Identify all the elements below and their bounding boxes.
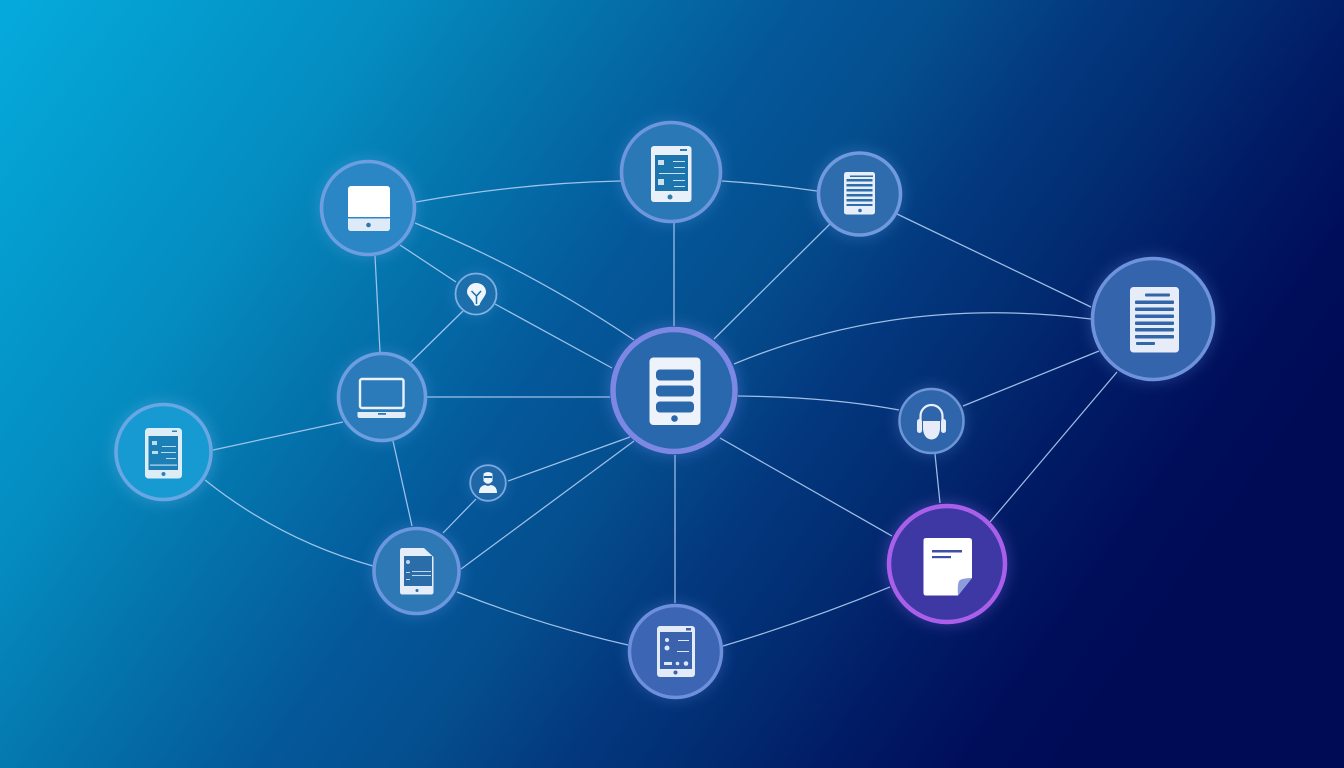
- icon: server tablet: [650, 358, 700, 425]
- node: laptop: [335, 350, 429, 444]
- icon: tablet with dashboard: [651, 146, 692, 202]
- icon: person: [479, 472, 497, 493]
- node: bottom tablet: [626, 602, 724, 700]
- icon: tablet: [348, 186, 390, 231]
- node: left tablet: [112, 400, 216, 504]
- icon: document with text lines: [1130, 287, 1179, 352]
- node: right document: [1089, 255, 1217, 383]
- node: lower-left file: [370, 525, 462, 617]
- node: top tablet: [618, 119, 724, 225]
- node: top-right document tablet: [814, 149, 904, 239]
- icon: tablet with chart: [145, 428, 182, 478]
- connection lines: [205, 181, 1117, 646]
- icon: file with list: [400, 548, 434, 594]
- node: headset: [896, 386, 966, 456]
- icon: document tablet: [844, 172, 875, 214]
- node: bulb: [453, 271, 499, 317]
- icon: bulb: [467, 283, 486, 306]
- node: person: [468, 463, 508, 503]
- icon: laptop: [358, 379, 406, 418]
- node: highlighted purple document: [885, 502, 1009, 626]
- node: top-left tablet: [318, 158, 418, 258]
- icon: note page: [924, 538, 972, 596]
- icon: headset: [917, 405, 946, 440]
- icon: tablet with apps: [657, 626, 695, 677]
- node: central server: [608, 324, 740, 456]
